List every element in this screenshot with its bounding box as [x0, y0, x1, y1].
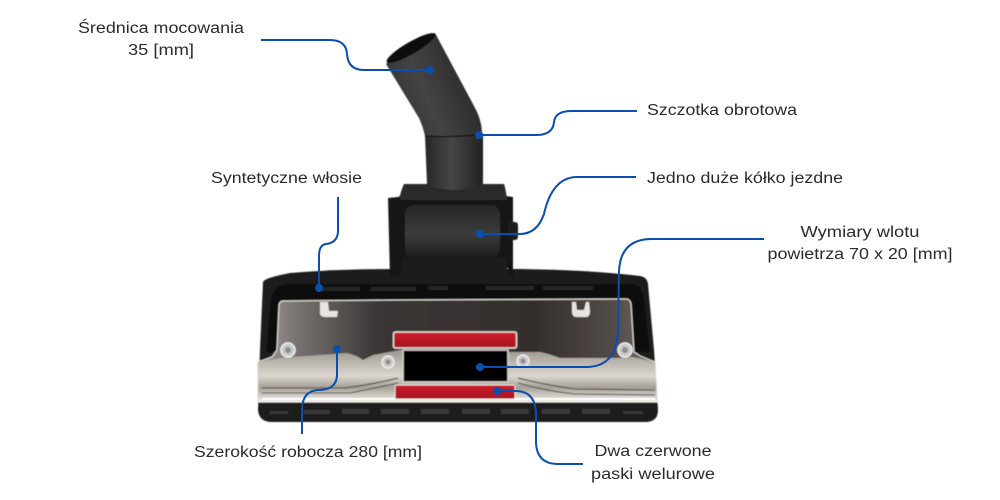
label: large wheel: Jedno duże kółko jezdne — [647, 170, 843, 187]
chrome lower band — [258, 350, 657, 402]
angled upper tube — [386, 33, 482, 137]
label: inlet dimensions: powietrza 70 x 20 [mm] — [768, 246, 952, 263]
label: synthetic bristles: Syntetyczne włosie — [211, 170, 362, 187]
connector dots — [315, 66, 501, 395]
upper red velour strip — [394, 332, 516, 348]
label: working width: Szerokość robocza 280 [mm] — [194, 444, 422, 461]
connector lines — [261, 40, 764, 464]
tube opening — [384, 29, 438, 67]
product photo: rotary vacuum brush — [258, 29, 658, 422]
air inlet — [403, 350, 508, 382]
label: red velour strips: paski welurowe — [591, 466, 715, 483]
wheel — [405, 205, 500, 258]
lower red velour strip — [395, 385, 515, 399]
label: inlet dimensions — [768, 224, 952, 263]
plate notches — [320, 302, 338, 317]
label: mounting diameter — [78, 19, 244, 59]
neck lower tube — [425, 134, 483, 190]
screws — [281, 343, 632, 368]
lower bristle strip — [270, 409, 643, 414]
inner cavity — [266, 284, 650, 352]
label: mounting diameter: Średnica mocowania — [78, 19, 244, 37]
label: rotary brush: Szczotka obrotowa — [647, 102, 797, 119]
label: mounting diameter: 35 [mm] — [128, 42, 194, 59]
chrome plate — [258, 299, 657, 402]
label: inlet dimensions: Wymiary wlotu — [800, 224, 920, 241]
label: red velour strips: Dwa czerwone — [594, 443, 712, 460]
brush body — [258, 269, 658, 422]
label: red velour strips — [591, 443, 715, 483]
wheel housing — [388, 184, 513, 277]
